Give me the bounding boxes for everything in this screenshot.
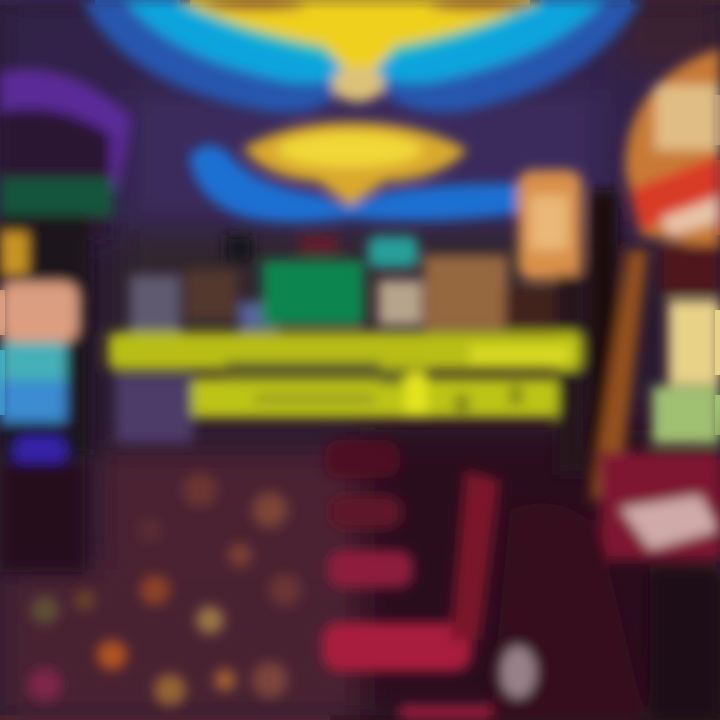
background crowd and machines: [115, 235, 560, 443]
upper chandelier with blue ring: [82, 0, 642, 113]
central green machine: [262, 236, 418, 326]
yellow headline text band: [108, 332, 582, 418]
foreground dark seat: [490, 503, 645, 720]
row of red chairs: [322, 440, 540, 720]
left slot machine arch: [0, 69, 132, 572]
right foreground slot machine: [600, 48, 720, 720]
right side slot column: [518, 170, 648, 505]
patterned carpet: [28, 473, 301, 706]
lower chandelier with blue ring: [190, 122, 527, 222]
